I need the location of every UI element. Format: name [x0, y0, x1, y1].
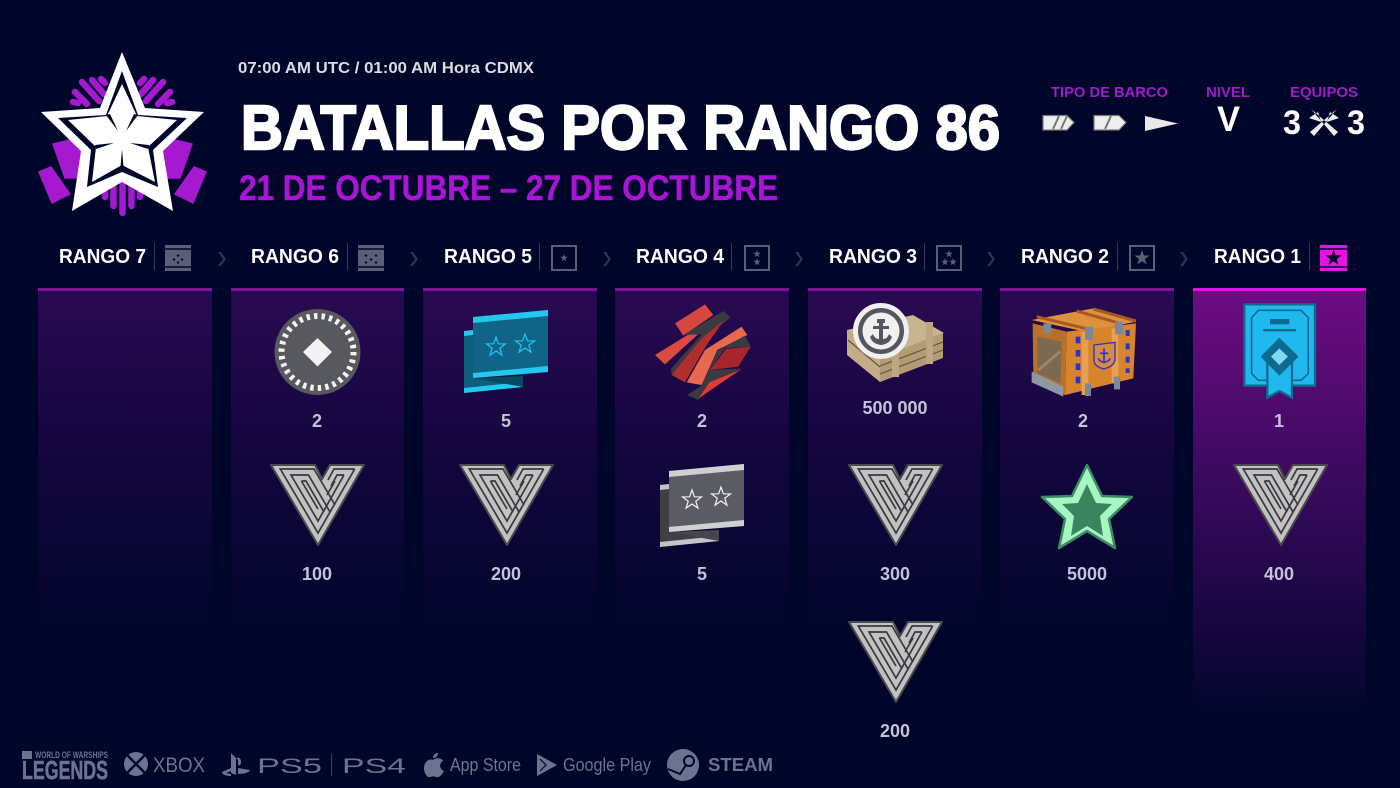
rank header: 1: RANGO 1 [1214, 246, 1301, 268]
info: tier: NIVEL [1206, 84, 1250, 101]
rank header: 6 [251, 243, 418, 271]
rank header: 5: RANGO 5 [444, 246, 532, 268]
logo: App Store: App Store [450, 755, 521, 775]
icon: certificate [1244, 304, 1315, 398]
logo: star emblem [39, 52, 206, 213]
info: ship type: TIPO DE BARCO [1051, 84, 1168, 101]
rank header: 7: RANGO 7 [59, 246, 146, 268]
icon: green star [1042, 465, 1132, 548]
logo star [41, 52, 204, 211]
footer: platform logos [22, 749, 773, 785]
icon: V emblem [271, 465, 364, 545]
rank header: 3: RANGO 3 [829, 246, 917, 268]
value: 5000 [1067, 564, 1107, 584]
rank header: 5 [444, 243, 611, 270]
value: 5 [501, 411, 511, 431]
panel: rank 6 [231, 288, 404, 640]
info: ship type [1043, 84, 1178, 131]
logo: World of Warships Legends: LEGENDS [22, 755, 108, 785]
value: 2 [312, 411, 322, 431]
rank header: 2 [1021, 243, 1188, 270]
value: 5 [697, 564, 707, 584]
icon: V emblem [460, 465, 553, 545]
icon: V emblem [1234, 465, 1327, 545]
panel: rank 1 [1193, 288, 1366, 720]
rank header: 7 [59, 243, 226, 271]
info: teams: 3 [1347, 104, 1365, 142]
icon: blue flags [464, 310, 548, 393]
value: 100 [302, 564, 332, 584]
rank header: 3 [829, 243, 995, 270]
panel: rank 7 [38, 288, 212, 640]
icon: V emblem [849, 622, 942, 702]
icon: orange crate [1032, 308, 1137, 397]
rank header: 2: RANGO 2 [1021, 246, 1109, 268]
icon: wooden crate with coin [847, 303, 944, 382]
icon: ship type 2 [1094, 116, 1126, 130]
logo: World of Warships Legends: WORLD OF WARSHIPS [35, 750, 108, 760]
logo: Xbox [124, 752, 205, 777]
info: teams: 3 [1283, 104, 1301, 142]
info: teams [1283, 84, 1365, 142]
panel: rank 2 [1000, 288, 1174, 640]
panel: rank 4 [615, 288, 789, 640]
rank header: 4: RANGO 4 [636, 246, 725, 268]
time text: 07:00 AM UTC / 01:00 AM Hora CDMX [238, 60, 535, 77]
logo: Google Play [537, 754, 651, 776]
info: teams: EQUIPOS [1290, 84, 1358, 101]
title: BATALLAS POR RANGO 86 [241, 94, 1000, 163]
rank header: 1 [1214, 243, 1347, 271]
icon: signal coin [274, 309, 360, 395]
icon: ship type 1 [1043, 116, 1074, 130]
logo: PlayStation: PS4 [342, 755, 407, 778]
logo: Google Play: Google Play [563, 755, 651, 775]
icon: V emblem [849, 465, 942, 545]
icon: camouflage [655, 304, 751, 400]
logo: App Store [424, 753, 521, 777]
value: 300 [880, 564, 910, 584]
logo: PlayStation [222, 753, 407, 778]
icon: crossed swords [1309, 109, 1339, 136]
logo: World of Warships Legends [22, 750, 108, 785]
value: 2 [697, 411, 707, 431]
icon: ship type 3 [1145, 116, 1178, 131]
logo: Steam [667, 749, 773, 781]
value: 400 [1264, 564, 1294, 584]
info: tier [1206, 84, 1250, 139]
rank header: 6: RANGO 6 [251, 246, 339, 268]
value: 2 [1078, 411, 1088, 431]
logo purple stripes and ribbons [39, 79, 206, 213]
value: 200 [880, 721, 910, 741]
date range: 21 DE OCTUBRE – 27 DE OCTUBRE [239, 169, 778, 208]
value: 200 [491, 564, 521, 584]
logo: PlayStation: PS5 [257, 755, 322, 778]
logo: Steam: STEAM [708, 755, 773, 775]
value: 1 [1274, 411, 1284, 431]
panel: rank 5 [423, 288, 597, 640]
info: tier: V [1217, 100, 1241, 139]
icon: grey flags [660, 464, 744, 547]
panel: rank 3 [808, 288, 982, 741]
value: 500 000 [862, 398, 928, 418]
rank header: 4 [636, 243, 803, 270]
logo: Xbox: XBOX [153, 754, 205, 777]
